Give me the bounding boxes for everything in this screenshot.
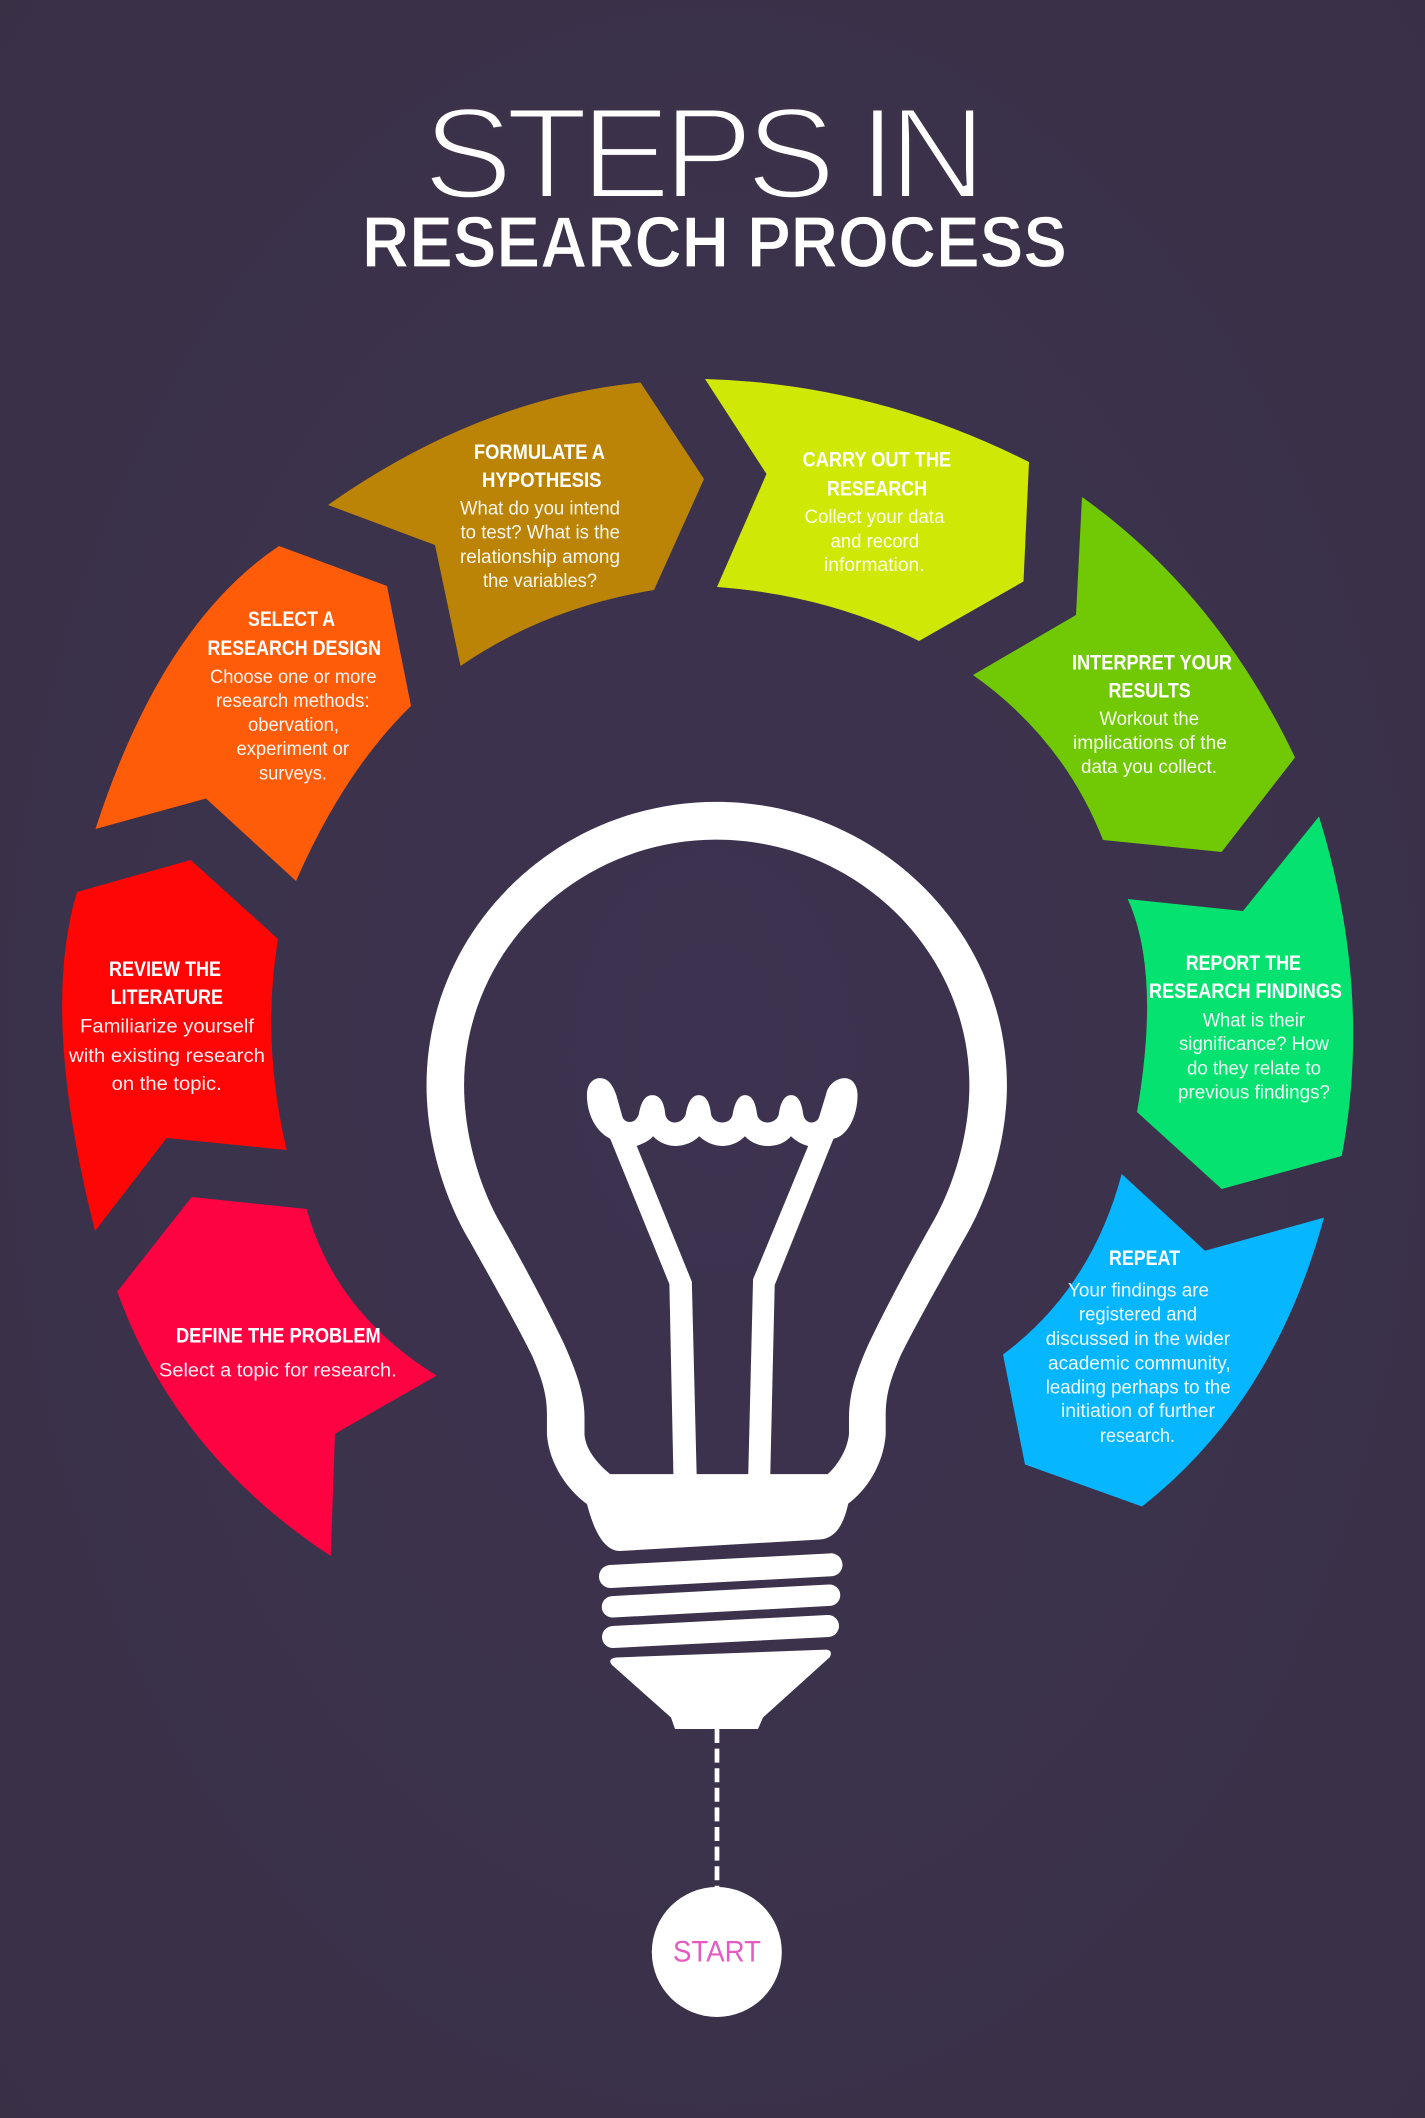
text: interpret your results description: implications of the (1073, 733, 1227, 754)
text: review the literature description: Familiarize yourself (80, 1016, 255, 1038)
start label: START (673, 1936, 761, 1968)
text: review the literature description: on the topic. (112, 1074, 222, 1095)
text: select a research design description: research methods: (216, 691, 370, 712)
arrow shape: select a research design (96, 546, 411, 881)
panel: review the literature (62, 860, 287, 1231)
heading: select a research design (208, 608, 381, 660)
text: review the literature description (68, 1016, 265, 1095)
arrow shape: interpret your results (973, 497, 1295, 852)
text: interpret your results description: Workout the (1100, 709, 1199, 730)
text: select a research design description: obervation, (248, 715, 339, 736)
arrow shape: formulate a hypothesis (328, 382, 704, 666)
heading: repeat: REPEAT (1109, 1247, 1180, 1270)
arrow shape: report the research findings (1128, 816, 1353, 1189)
title (362, 80, 1067, 283)
text: report the research findings description: previous findings? (1178, 1083, 1330, 1104)
text: formulate a hypothesis description: to test? What is the (460, 523, 620, 544)
text: carry out the research description: and record (831, 532, 919, 552)
text: carry out the research description: Collect your data (804, 507, 945, 528)
text: formulate a hypothesis description: the variables? (483, 571, 597, 592)
text: repeat description: leading perhaps to the (1046, 1378, 1231, 1399)
heading: define the problem: DEFINE THE PROBLEM (176, 1325, 381, 1348)
arrow shape: review the literature (62, 860, 287, 1231)
heading: report the research findings (1149, 952, 1342, 1003)
panel: interpret your results (973, 497, 1295, 852)
panel: carry out the research (705, 379, 1029, 641)
text: report the research findings description: do they relate to (1187, 1059, 1321, 1080)
text: repeat description: discussed in the wider (1046, 1329, 1231, 1350)
text: repeat description: research. (1100, 1426, 1175, 1447)
heading: review the literature: REVIEW THE (109, 958, 221, 981)
text: repeat description: Your findings are (1068, 1280, 1209, 1302)
heading: interpret your results: RESULTS (1108, 680, 1191, 702)
text: carry out the research description (804, 507, 945, 576)
heading: carry out the research: RESEARCH (827, 477, 927, 500)
heading: carry out the research: CARRY OUT THE (803, 449, 951, 472)
start circle (652, 1887, 782, 2017)
text: report the research findings description (1178, 1010, 1330, 1104)
bulb glass outline (427, 802, 1007, 1505)
heading: select a research design: RESEARCH DESIGN (208, 637, 381, 660)
arrow shape: define the problem (117, 1197, 437, 1556)
text: interpret your results description: data you collect. (1081, 757, 1217, 778)
bulb screw threads (610, 1565, 831, 1637)
text: carry out the research description: information. (824, 555, 925, 576)
text: report the research findings description: significance? How (1179, 1034, 1329, 1055)
arrow shape: repeat (1003, 1174, 1324, 1506)
heading: interpret your results: INTERPRET YOUR (1072, 652, 1232, 675)
text: formulate a hypothesis description: What do you intend (460, 499, 620, 520)
heading: interpret your results (1072, 652, 1232, 702)
heading: carry out the research (803, 449, 951, 500)
bulb filament (587, 1078, 858, 1478)
panel: select a research design (96, 546, 411, 881)
arrow shape: carry out the research (705, 379, 1029, 641)
heading: formulate a hypothesis: HYPOTHESIS (482, 469, 602, 492)
panel: formulate a hypothesis (328, 382, 704, 666)
icon: light bulb (427, 802, 1007, 1729)
text: repeat description: academic community, (1048, 1354, 1231, 1375)
heading: review the literature (109, 958, 223, 1009)
text: formulate a hypothesis description (460, 499, 620, 592)
heading: formulate a hypothesis (474, 441, 605, 492)
text: select a research design description (210, 667, 376, 784)
text: select a research design description: surveys. (259, 763, 327, 784)
text: select a research design description: experiment or (236, 739, 350, 760)
title line: steps in: STEPS IN (423, 80, 979, 226)
text: repeat description (1046, 1280, 1231, 1447)
text: formulate a hypothesis description: relationship among (460, 547, 620, 568)
bulb base cone (610, 1650, 831, 1729)
text: report the research findings description: What is their (1203, 1010, 1306, 1032)
heading: formulate a hypothesis: FORMULATE A (474, 441, 605, 464)
heading: report the research findings: RESEARCH FINDINGS (1149, 980, 1342, 1003)
dashed pull cord (715, 1729, 719, 1888)
text: interpret your results description (1073, 709, 1227, 778)
heading: report the research findings: REPORT THE (1186, 952, 1301, 975)
start button (652, 1887, 782, 2017)
panel: report the research findings (1128, 816, 1353, 1189)
text: review the literature description: with existing research (68, 1046, 265, 1067)
title line: research process: RESEARCH PROCESS (362, 203, 1067, 283)
text: repeat description: initiation of further (1061, 1401, 1216, 1422)
panel: define the problem (117, 1197, 437, 1556)
heading: review the literature: LITERATURE (111, 986, 223, 1009)
heading: select a research design: SELECT A (248, 608, 335, 631)
bulb collar (586, 1500, 849, 1551)
text: select a research design description: Choose one or more (210, 667, 376, 688)
text: repeat description: registered and (1079, 1304, 1197, 1326)
text: define the problem description: Select a topic for research. (159, 1361, 397, 1382)
panel: repeat (1003, 1174, 1324, 1506)
